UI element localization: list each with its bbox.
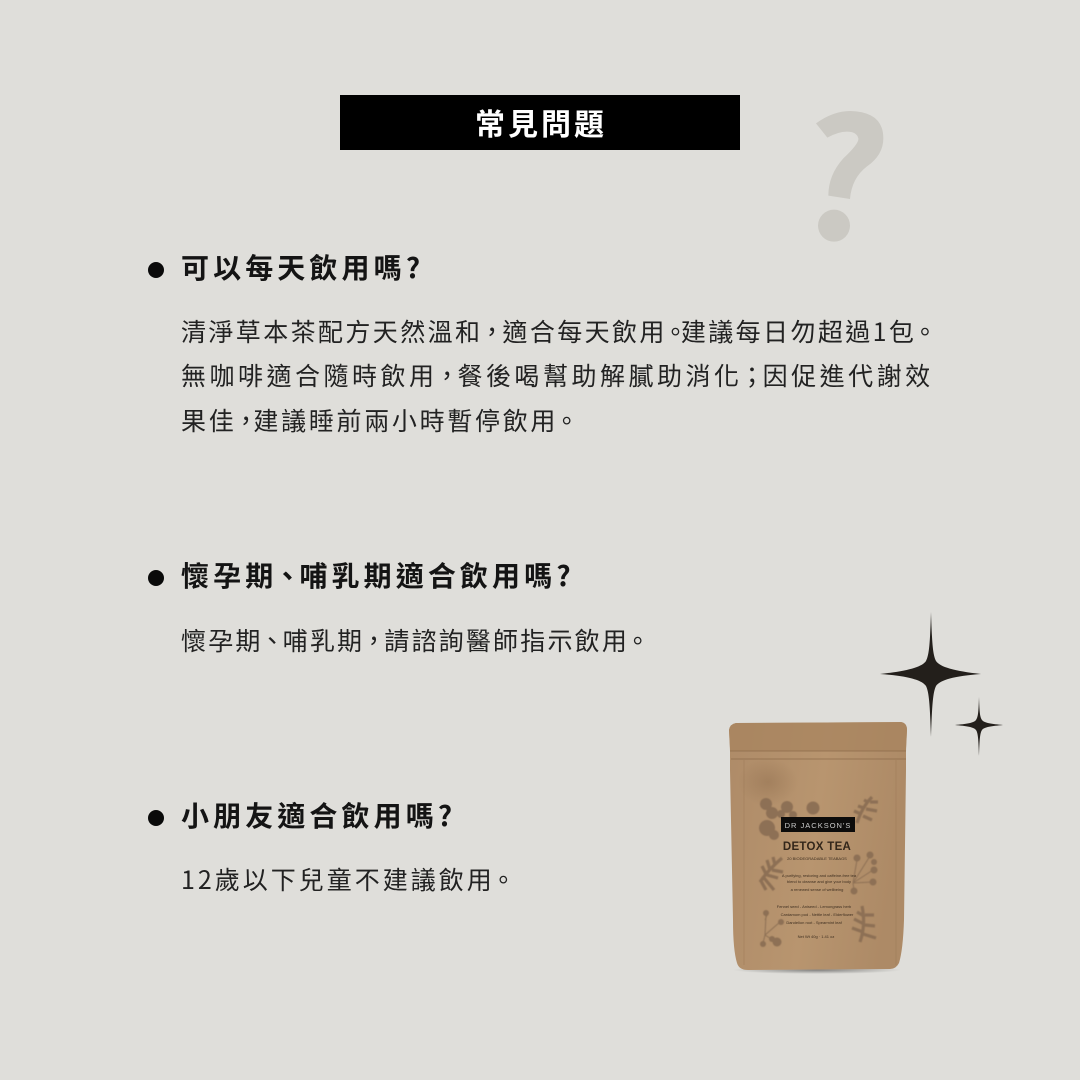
pouch small text: a renewed sense of wellbeing	[791, 887, 843, 892]
pouch side shading	[738, 758, 798, 806]
heading: question 3: 小朋友適合飲用嗎?	[181, 795, 456, 835]
pouch small text: Net Wt 40g · 1.41 oz	[798, 934, 834, 939]
answer 2: 懷孕期、哺乳期，請諮詢醫師指示飲用。	[181, 622, 650, 658]
pouch leaf prints	[759, 797, 878, 947]
pouch small text: A purifying, restoring and caffeine-free tea	[782, 873, 857, 878]
title banner	[340, 95, 740, 150]
pouch small text: Cardamom pod - Nettle leaf - Elderflower	[781, 912, 854, 917]
pouch label	[777, 817, 857, 939]
question block 2	[148, 555, 650, 658]
product name: DETOX TEA	[783, 841, 851, 853]
bullet 3	[148, 810, 164, 826]
pouch small text: Dandelion root - Spearmint leaf	[786, 920, 843, 925]
product: tea pouch	[729, 722, 907, 974]
question block 1: 清淨草本茶配方天然溫和，適合每天飲用。建議每日勿超過1包。	[181, 313, 937, 349]
answer 3: 12歲以下兒童不建議飲用。	[181, 861, 516, 897]
bullet 2	[148, 570, 164, 586]
heading: question 1: 可以每天飲用嗎?	[181, 247, 424, 287]
title banner: 常見問題	[475, 100, 607, 144]
pouch small text: 20 BIODEGRADABLE TEABAGS	[787, 856, 847, 861]
question block 1: 無咖啡適合隨時飲用，餐後喝幫助解膩助消化；因促進代謝效	[181, 357, 934, 393]
pouch small text	[777, 856, 857, 939]
question block 1	[148, 247, 937, 438]
icon: question mark	[816, 111, 884, 242]
pouch top band	[729, 722, 907, 751]
heading: question 2: 懷孕期、哺乳期適合飲用嗎?	[181, 555, 575, 595]
answer 1	[181, 313, 937, 438]
question block 3	[148, 795, 516, 897]
pouch small text: blend to cleanse and give your body	[787, 879, 851, 884]
brand name: DR JACKSON'S	[785, 821, 851, 830]
pouch body	[729, 722, 907, 970]
pouch small text: Fennel seed - Aniseed - Lemongrass herb	[777, 904, 852, 909]
pouch shadow	[733, 966, 901, 974]
brand plate	[781, 817, 855, 832]
question block 1: 果佳，建議睡前兩小時暫停飲用。	[181, 402, 579, 438]
bullet 1	[148, 262, 164, 278]
icon: sparkles	[880, 612, 1003, 756]
